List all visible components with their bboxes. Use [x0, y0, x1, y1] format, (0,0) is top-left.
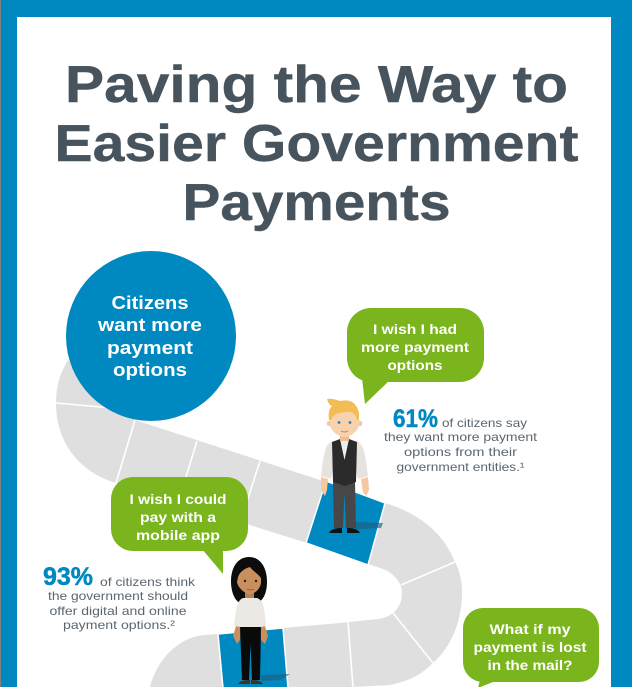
arms and hands: [233, 626, 268, 644]
stat: 93 percent: of citizens think: [100, 575, 196, 589]
speech bubble: mobile app: [111, 477, 248, 574]
eyes: [338, 421, 340, 424]
speech bubble: mobile app: I wish I could: [130, 491, 226, 507]
speech bubble: more payment options: more payment: [361, 339, 469, 355]
stat: 61 percent: options from their: [404, 445, 517, 459]
circle heading: citizens want more payment options: Citizens: [112, 292, 188, 313]
circle heading: citizens want more payment options: payment: [107, 337, 193, 358]
speech bubble: payment lost in the mail: What if my: [490, 621, 571, 637]
shoe shadow: [345, 522, 383, 530]
shirt: [234, 598, 266, 627]
trousers: [240, 627, 261, 680]
ears: [327, 421, 332, 426]
shoes: [329, 528, 360, 533]
speech bubble: more payment options: [347, 308, 484, 404]
stat: 93 percent: offer digital and online: [50, 604, 187, 618]
face: [237, 567, 261, 594]
speech bubble: mobile app: pay with a: [140, 509, 216, 525]
circle heading: citizens want more payment options: want more: [97, 314, 202, 335]
winding road path: [56, 360, 462, 687]
title: Payments: [182, 174, 450, 232]
title: Easier Government: [54, 115, 578, 173]
blue tile: upper: [306, 481, 385, 565]
title: Paving the Way to: [65, 56, 568, 114]
hair: [231, 557, 267, 603]
speech bubble: mobile app: mobile app: [136, 527, 220, 543]
speech bubble: more payment options: options: [388, 357, 443, 373]
shoes: [238, 680, 263, 684]
eyes and mouth: [244, 580, 257, 590]
stat: 93 percent: 93%: [43, 563, 93, 591]
blue tile: lower: [218, 628, 288, 687]
speech bubble: payment lost in the mail: in the mail?: [488, 657, 572, 673]
shirt collar: [337, 440, 352, 470]
vest: [332, 439, 357, 486]
figure: man in vest: [321, 399, 383, 533]
stat: 61 percent: 61%: [393, 405, 438, 433]
neck: [245, 590, 254, 599]
speech bubble: payment lost in the mail: payment is lost: [474, 639, 587, 655]
hands: [321, 477, 369, 496]
stat: 61 percent: [384, 405, 538, 474]
mouth: [341, 431, 348, 432]
title: [54, 56, 578, 232]
circle heading: citizens want more payment options: options: [113, 359, 187, 380]
circle heading: citizens want more payment options: [66, 251, 236, 421]
stat: 93 percent: [43, 563, 196, 632]
stat: 61 percent: they want more payment: [384, 430, 538, 444]
stat: 61 percent: government entities.¹: [396, 460, 524, 474]
head: [330, 406, 359, 437]
stat: 93 percent: the government should: [48, 589, 188, 603]
neck: [340, 434, 349, 441]
hair: [327, 399, 359, 420]
arms and shirt: [321, 441, 368, 479]
legs: [333, 482, 356, 528]
shoe shadow: [260, 674, 290, 681]
stat: 61 percent: of citizens say: [442, 416, 527, 430]
road tile dividers: [56, 403, 455, 687]
stat: 93 percent: payment options.²: [63, 618, 175, 632]
speech bubble: more payment options: I wish I had: [373, 321, 457, 337]
figure: woman in white shirt: [231, 557, 290, 684]
speech bubble: payment lost in the mail: [463, 608, 599, 687]
